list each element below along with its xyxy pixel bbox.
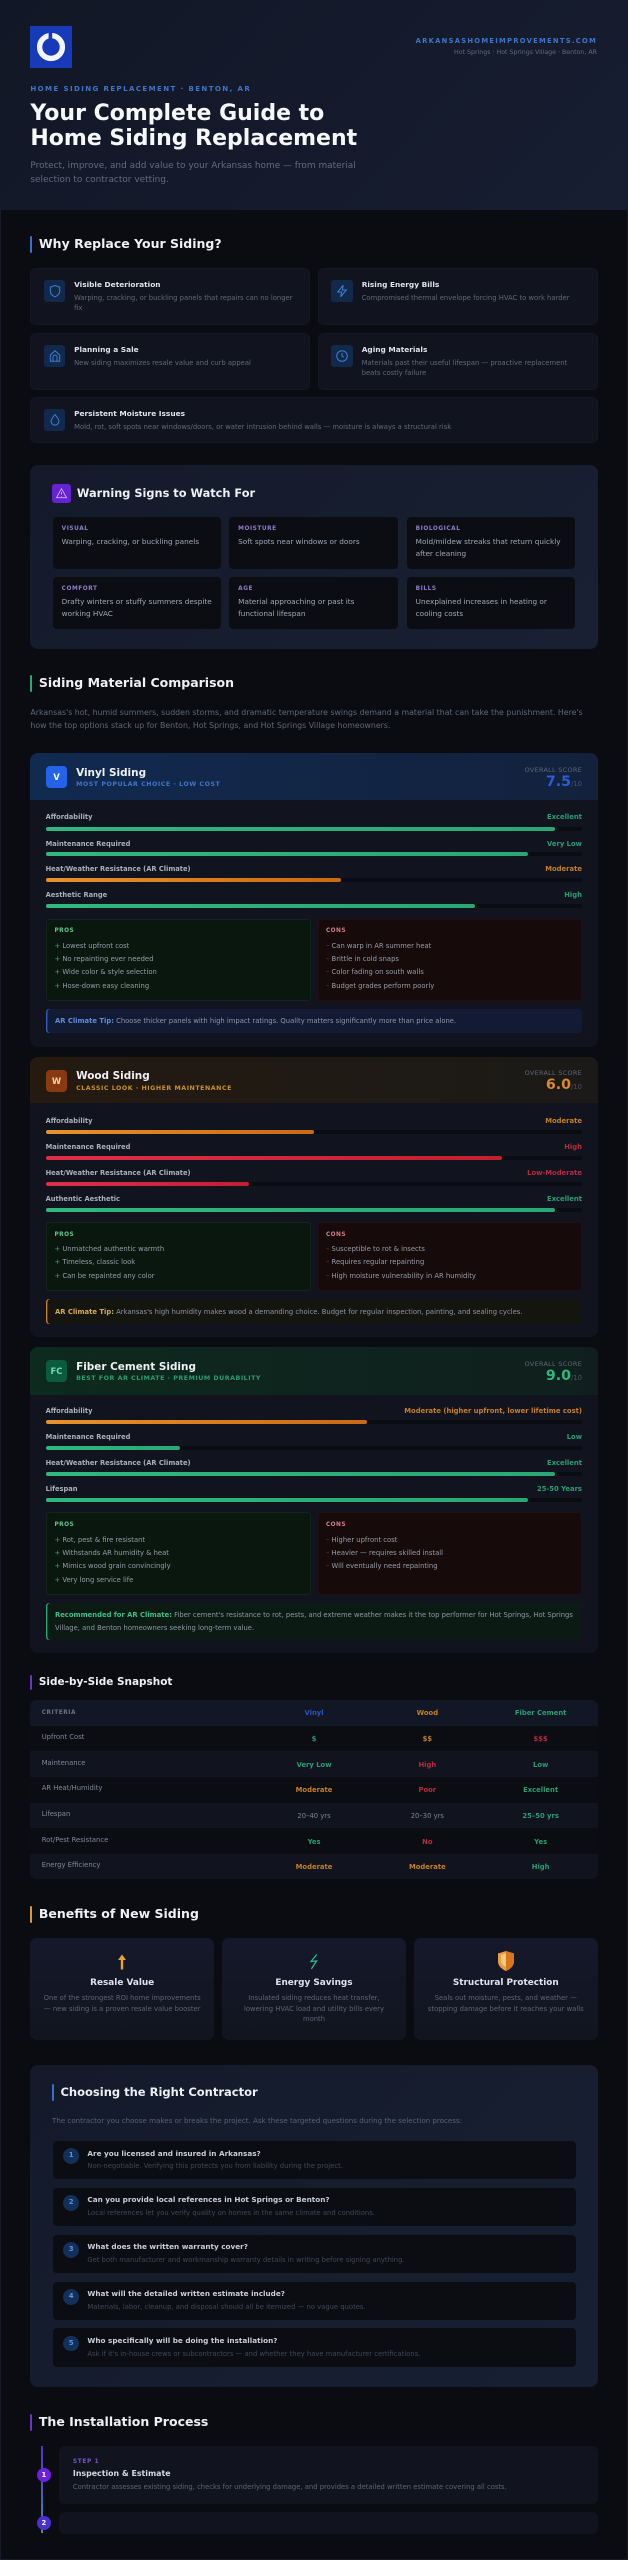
cons list bbox=[326, 1536, 443, 1570]
rating: affordability: Affordability bbox=[46, 1407, 92, 1415]
rating: affordability bbox=[46, 1407, 582, 1424]
description: fix bbox=[74, 304, 82, 312]
pros list: + Withstands AR humidity & heat bbox=[54, 1549, 169, 1557]
site domain: ARKANSASHOMEIMPROVEMENTS.COM bbox=[416, 36, 597, 44]
rating: maintenance bbox=[46, 1143, 582, 1160]
rating: heat resistance: Moderate bbox=[545, 865, 582, 873]
cell: bills: BILLS bbox=[416, 586, 437, 592]
row: energy efficiency: Moderate bbox=[296, 1863, 332, 1871]
panel: warning signs bbox=[30, 465, 598, 649]
description: Mold, rot, soft spots near windows/doors, or water intrusion behind walls — moisture is always a structural risk bbox=[74, 423, 451, 431]
benefit title: Structural Protection bbox=[453, 1978, 559, 1988]
cell text: Mold/mildew streaks that return quickly bbox=[416, 537, 561, 546]
benefit text bbox=[244, 1994, 384, 2023]
row: maintenance: Low bbox=[533, 1761, 548, 1769]
cons list: – Requires regular repainting bbox=[326, 1258, 424, 1266]
overall label: OVERALL SCORE bbox=[525, 1360, 582, 1368]
benefit text: stopping damage before it reaches your walls bbox=[428, 2005, 584, 2013]
fiber recommendation bbox=[46, 1603, 582, 1640]
card: structural protection bbox=[414, 1938, 598, 2040]
rating: maintenance: Very Low bbox=[547, 840, 582, 848]
row: lifespan: 20–40 yrs bbox=[297, 1812, 331, 1820]
heading: material comparison: Siding Material Comparison bbox=[39, 675, 234, 690]
cell: comfort bbox=[53, 577, 221, 629]
pros list: + Timeless, classic look bbox=[54, 1258, 135, 1266]
cell text: Warping, cracking, or buckling panels bbox=[62, 537, 199, 546]
timeline bbox=[36, 2446, 52, 2534]
row: energy efficiency: High bbox=[532, 1863, 550, 1871]
fiber recommendation: Recommended for AR Climate: Fiber cement's resistance to rot, pests, and extreme weather makes it the top performer for Hot Springs, Hot Springs bbox=[55, 1611, 573, 1619]
wood tip bbox=[46, 1299, 582, 1324]
vinyl tagline: MOST POPULAR CHOICE · LOW COST bbox=[76, 781, 220, 788]
fiber pros: PROS bbox=[54, 1522, 74, 1528]
cons list bbox=[326, 942, 434, 990]
subtitle: selection to contractor vetting. bbox=[30, 175, 169, 185]
table header row: Vinyl bbox=[304, 1709, 324, 1717]
pros list bbox=[54, 1536, 171, 1584]
rating: aesthetic bbox=[46, 891, 582, 908]
rating: heat resistance bbox=[46, 865, 582, 882]
rating: affordability bbox=[46, 813, 582, 831]
rating: maintenance: Maintenance Required bbox=[46, 1433, 130, 1441]
answer: Materials, labor, cleanup, and disposal should all be itemized — no vague quotes. bbox=[87, 2303, 366, 2311]
wood badge: W bbox=[52, 1076, 61, 1086]
rating: maintenance bbox=[46, 1433, 582, 1450]
vinyl pros: PROS bbox=[54, 928, 74, 934]
cell: age: AGE bbox=[238, 586, 253, 592]
rating: lifespan: 25-50 Years bbox=[537, 1485, 582, 1493]
title: Planning a Sale bbox=[74, 345, 139, 354]
cell text: cooling costs bbox=[416, 609, 463, 618]
row: maintenance: Very Low bbox=[297, 1761, 332, 1769]
question 5: 5 bbox=[69, 2339, 74, 2347]
description bbox=[74, 294, 292, 312]
panel: fiber cement bbox=[30, 1347, 598, 1653]
overall label: OVERALL SCORE bbox=[525, 766, 582, 774]
rating: affordability: Affordability bbox=[46, 813, 92, 821]
rating: lifespan bbox=[46, 1485, 582, 1502]
benefit text: Seals out moisture, pests, and weather — bbox=[435, 1994, 577, 2002]
title bbox=[30, 101, 357, 151]
intro paragraph: how the top options stack up for Benton, Hot Springs, and Hot Springs Village homeowners. bbox=[30, 721, 390, 730]
pros list: + Lowest upfront cost bbox=[54, 942, 129, 950]
benefit text: Insulated siding reduces heat transfer, bbox=[248, 1994, 380, 2002]
question 1: 1 bbox=[69, 2151, 74, 2159]
row: energy efficiency: Energy Efficiency bbox=[42, 1861, 100, 1869]
row: lifespan bbox=[30, 1803, 598, 1828]
cell text: functional lifespan bbox=[238, 609, 305, 618]
pros list: + Hose-down easy cleaning bbox=[54, 982, 149, 990]
icon: lightning bbox=[310, 1954, 318, 1970]
card: rising energy bills bbox=[318, 268, 598, 325]
row: heat humidity: AR Heat/Humidity bbox=[42, 1784, 102, 1792]
cell text bbox=[62, 597, 212, 618]
pros list: + Can be repainted any color bbox=[54, 1272, 155, 1280]
step marker 1 bbox=[37, 2468, 51, 2482]
icon: bolt bbox=[331, 280, 353, 302]
panel: wood siding bbox=[30, 1057, 598, 1337]
cons list: – Will eventually need repainting bbox=[326, 1562, 438, 1570]
overall label: OVERALL SCORE bbox=[525, 1069, 582, 1077]
description: New siding maximizes resale value and curb appeal bbox=[74, 359, 251, 367]
benefit text: — new siding is a proven resale value booster bbox=[44, 2005, 200, 2013]
title: Visible Deterioration bbox=[74, 280, 161, 289]
logo bbox=[30, 26, 72, 68]
cons list: – Heavier — requires skilled install bbox=[326, 1549, 443, 1557]
row: heat humidity bbox=[30, 1777, 598, 1803]
step marker 2 bbox=[37, 2516, 51, 2530]
card: resale value bbox=[30, 1938, 214, 2040]
cell text: Material approaching or past its bbox=[238, 597, 354, 606]
row: heat humidity: Moderate bbox=[296, 1786, 332, 1794]
fiber score: 9.0/10 bbox=[546, 1368, 582, 1384]
rating: heat resistance: Heat/Weather Resistance (AR Climate) bbox=[46, 1459, 191, 1467]
cons list: – Color fading on south walls bbox=[326, 968, 424, 976]
rating: affordability: Moderate bbox=[545, 1117, 582, 1125]
benefit text: lowering HVAC load and utility bills every bbox=[244, 2005, 384, 2013]
title: Home Siding Replacement bbox=[30, 126, 357, 151]
cell text: after cleaning bbox=[416, 549, 466, 558]
rating: aesthetic: Excellent bbox=[547, 1195, 582, 1203]
row: maintenance: High bbox=[418, 1761, 436, 1769]
title: Aging Materials bbox=[362, 345, 427, 354]
answer: Ask if it's in-house crews or subcontractors — and whether they have manufacturer certifications. bbox=[87, 2350, 420, 2358]
vinyl badge: V bbox=[53, 772, 60, 782]
title: Persistent Moisture Issues bbox=[74, 409, 185, 418]
table header row: CRITERIA bbox=[42, 1710, 76, 1716]
title: Rising Energy Bills bbox=[362, 280, 439, 289]
row: upfront cost: $$$ bbox=[534, 1735, 548, 1743]
pros list: + Mimics wood grain convincingly bbox=[54, 1562, 171, 1570]
wood pros: PROS bbox=[54, 1232, 74, 1238]
panel: choosing contractor bbox=[30, 2065, 598, 2387]
rating: maintenance bbox=[46, 840, 582, 856]
question 2: Can you provide local references in Hot Springs or Benton? bbox=[87, 2195, 330, 2204]
vinyl cons: CONS bbox=[326, 928, 346, 934]
cell: visual bbox=[53, 517, 221, 569]
vinyl score: 7.5/10 bbox=[546, 774, 582, 790]
row: lifespan: 20–30 yrs bbox=[411, 1812, 444, 1820]
wood header bbox=[30, 1057, 598, 1103]
step 1 card bbox=[59, 2446, 598, 2504]
cell text bbox=[238, 597, 354, 618]
pros list: + No repainting ever needed bbox=[54, 955, 153, 963]
icon: warning triangle bbox=[52, 484, 71, 503]
cons list: – Can warp in AR summer heat bbox=[326, 942, 431, 950]
row: lifespan: Lifespan bbox=[42, 1810, 70, 1818]
vinyl tip: AR Climate Tip: Choose thicker panels with high impact ratings. Quality matters significantly more than price alone. bbox=[55, 1017, 456, 1025]
step marker 2: 2 bbox=[42, 2519, 46, 2527]
question 3: What does the written warranty cover? bbox=[87, 2242, 248, 2251]
icon: water drop bbox=[44, 409, 65, 431]
wood tip: AR Climate Tip: Arkansas's high humidity makes wood a demanding choice. Budget for regular inspection, painting, and sealing cycles. bbox=[55, 1308, 522, 1316]
question 4: 4 bbox=[69, 2292, 74, 2300]
icon: shield bbox=[44, 280, 65, 302]
cell text: Soft spots near windows or doors bbox=[238, 537, 360, 546]
service areas: Hot Springs · Hot Springs Village · Benton, AR bbox=[454, 49, 597, 56]
row: rot pest: Yes bbox=[308, 1838, 321, 1846]
benefit text bbox=[44, 1994, 201, 2013]
row: upfront cost bbox=[30, 1726, 598, 1751]
cell: bills bbox=[407, 577, 575, 629]
cell text: Unexplained increases in heating or bbox=[416, 597, 547, 606]
row: rot pest: Rot/Pest Resistance bbox=[42, 1836, 108, 1844]
cell: biological bbox=[407, 517, 575, 569]
vinyl header bbox=[30, 753, 598, 800]
benefit title: Energy Savings bbox=[275, 1978, 353, 1988]
rating: affordability bbox=[46, 1117, 582, 1134]
intro text: The contractor you choose makes or breaks the project. Ask these targeted questions during the selection process: bbox=[52, 2116, 462, 2125]
benefit text: One of the strongest ROI home improvements bbox=[44, 1994, 201, 2002]
rating: aesthetic: Aesthetic Range bbox=[46, 891, 107, 899]
rating: affordability: Moderate (higher upfront, lower lifetime cost) bbox=[404, 1407, 582, 1415]
fiber badge bbox=[46, 1360, 67, 1382]
step label: STEP 1 bbox=[73, 2459, 99, 2465]
fiber name: Fiber Cement Siding bbox=[76, 1361, 196, 1373]
cell text bbox=[416, 597, 547, 618]
heading: benefits: Benefits of New Siding bbox=[39, 1906, 199, 1921]
cell text: Drafty winters or stuffy summers despite bbox=[62, 597, 212, 606]
fiber tagline: BEST FOR AR CLIMATE · PREMIUM DURABILITY bbox=[76, 1375, 261, 1382]
row: energy efficiency bbox=[30, 1854, 598, 1879]
table header row bbox=[30, 1700, 598, 1726]
cell: age bbox=[229, 577, 398, 629]
benefit text bbox=[414, 1993, 598, 2014]
question 2: 2 bbox=[69, 2198, 74, 2206]
step text: Contractor assesses existing siding, checks for underlying damage, and provides a detailed written estimate covering all costs. bbox=[73, 2483, 507, 2491]
description: Compromised thermal envelope forcing HVAC to work harder bbox=[362, 294, 570, 302]
cell text bbox=[416, 537, 561, 558]
vinyl name: Vinyl Siding bbox=[76, 767, 146, 779]
pros list: + Rot, pest & fire resistant bbox=[54, 1536, 145, 1544]
pros list: + Very long service life bbox=[54, 1576, 133, 1584]
question 5 bbox=[53, 2328, 576, 2367]
row: rot pest: No bbox=[422, 1838, 433, 1846]
header bbox=[0, 0, 628, 210]
description: beats costly failure bbox=[362, 369, 426, 377]
icon: clock bbox=[331, 344, 353, 367]
cell: moisture bbox=[229, 517, 398, 569]
intro paragraph bbox=[30, 708, 583, 730]
answer: Local references let you verify quality on homes in the same climate and conditions. bbox=[87, 2209, 375, 2217]
wood cons: CONS bbox=[326, 1232, 346, 1238]
step marker 1: 1 bbox=[42, 2471, 46, 2479]
rating: maintenance: Low bbox=[567, 1433, 582, 1441]
subtitle bbox=[30, 161, 356, 185]
question 3: 3 bbox=[69, 2245, 74, 2253]
rating: aesthetic bbox=[46, 1195, 582, 1212]
row: energy efficiency: Moderate bbox=[409, 1863, 446, 1871]
question 1 bbox=[53, 2141, 576, 2179]
heading: installation process: The Installation Process bbox=[39, 2414, 208, 2429]
card: persistent moisture bbox=[30, 397, 598, 443]
row: lifespan: 25–50 yrs bbox=[522, 1812, 559, 1820]
wood name: Wood Siding bbox=[76, 1070, 150, 1082]
row: upfront cost: $ bbox=[312, 1735, 316, 1743]
pros list: + Wide color & style selection bbox=[54, 968, 157, 976]
card: planning a sale bbox=[30, 333, 310, 390]
rating: heat resistance bbox=[46, 1459, 582, 1476]
icon: power ring bbox=[36, 33, 66, 62]
subtitle: Protect, improve, and add value to your Arkansas home — from material bbox=[30, 161, 356, 171]
description: Materials past their useful lifespan — proactive replacement bbox=[362, 359, 567, 367]
cell: visual: VISUAL bbox=[62, 526, 88, 532]
cons list: – Budget grades perform poorly bbox=[326, 982, 434, 990]
benefit text: month bbox=[303, 2015, 325, 2023]
cell: biological: BIOLOGICAL bbox=[416, 526, 460, 532]
rating: lifespan: Lifespan bbox=[46, 1485, 78, 1493]
question 4 bbox=[53, 2282, 576, 2320]
table header row: Fiber Cement bbox=[515, 1709, 566, 1717]
pros list: + Unmatched authentic warmth bbox=[54, 1245, 164, 1253]
question 2 bbox=[53, 2188, 576, 2226]
rating: aesthetic: Authentic Aesthetic bbox=[46, 1195, 120, 1203]
cons list: – Brittle in cold snaps bbox=[326, 955, 399, 963]
comparison table bbox=[30, 1700, 598, 1879]
rating: maintenance: Maintenance Required bbox=[46, 1143, 130, 1151]
rating: heat resistance: Heat/Weather Resistance (AR Climate) bbox=[46, 865, 191, 873]
answer: Get both manufacturer and workmanship warranty details in writing before signing anything. bbox=[87, 2256, 405, 2264]
rating: heat resistance: Excellent bbox=[547, 1459, 582, 1467]
cons list: – Susceptible to rot & insects bbox=[326, 1245, 425, 1253]
cell text: working HVAC bbox=[62, 609, 113, 618]
card: visible deterioration bbox=[30, 268, 310, 325]
intro paragraph: Arkansas's hot, humid summers, sudden storms, and dramatic temperature swings demand a material that can take the punishment. Here's bbox=[30, 708, 583, 717]
rating: maintenance: Maintenance Required bbox=[46, 840, 130, 848]
wood cons bbox=[318, 1222, 582, 1291]
cons list: – Higher upfront cost bbox=[326, 1536, 397, 1544]
fiber cons bbox=[318, 1512, 582, 1595]
vinyl pros bbox=[46, 919, 311, 1001]
description: Warping, cracking, or buckling panels that repairs can no longer bbox=[74, 294, 292, 302]
heading: snapshot: Side-by-Side Snapshot bbox=[39, 1676, 172, 1688]
question 3 bbox=[53, 2235, 576, 2273]
icon: house bbox=[44, 344, 65, 367]
pros list bbox=[54, 1245, 164, 1280]
row: heat humidity: Excellent bbox=[523, 1786, 558, 1794]
fiber cons: CONS bbox=[326, 1522, 346, 1528]
icon: shield bbox=[498, 1951, 514, 1971]
row: upfront cost: $$ bbox=[423, 1735, 432, 1743]
cell: moisture: MOISTURE bbox=[238, 526, 277, 532]
rating: heat resistance: Low-Moderate bbox=[527, 1169, 582, 1177]
vinyl tip bbox=[46, 1009, 582, 1033]
panel: vinyl siding bbox=[30, 753, 598, 1047]
timeline line bbox=[41, 2446, 43, 2533]
row: maintenance: Maintenance bbox=[42, 1759, 85, 1767]
wood tagline: CLASSIC LOOK · HIGHER MAINTENANCE bbox=[76, 1085, 232, 1092]
cons list: – High moisture vulnerability in AR humidity bbox=[326, 1272, 476, 1280]
eyebrow: HOME SIDING REPLACEMENT · BENTON, AR bbox=[30, 84, 251, 93]
fiber header bbox=[30, 1347, 598, 1395]
heading: Choosing the Right Contractor bbox=[60, 2085, 258, 2099]
answer: Non-negotiable. Verifying this protects you from liability during the project. bbox=[87, 2162, 343, 2170]
title: Your Complete Guide to bbox=[30, 101, 324, 126]
rating: maintenance: High bbox=[564, 1143, 582, 1151]
question 4: What will the detailed written estimate include? bbox=[87, 2289, 285, 2298]
card: aging materials bbox=[318, 333, 598, 390]
fiber pros bbox=[46, 1512, 311, 1595]
fiber badge: FC bbox=[51, 1366, 62, 1376]
wood badge bbox=[46, 1070, 67, 1092]
row: maintenance bbox=[30, 1751, 598, 1777]
rating: aesthetic: High bbox=[564, 891, 582, 899]
heading: why replace: Why Replace Your Siding? bbox=[39, 236, 222, 251]
rating: affordability: Affordability bbox=[46, 1117, 92, 1125]
row: upfront cost: Upfront Cost bbox=[42, 1733, 84, 1741]
row: heat humidity: Poor bbox=[418, 1786, 436, 1794]
rating: heat resistance bbox=[46, 1169, 582, 1186]
row: rot pest bbox=[30, 1828, 598, 1854]
benefit title: Resale Value bbox=[90, 1978, 154, 1988]
card: energy savings bbox=[222, 1938, 406, 2040]
rating: heat resistance: Heat/Weather Resistance (AR Climate) bbox=[46, 1169, 191, 1177]
cell: comfort: COMFORT bbox=[62, 586, 98, 592]
icon: up arrow bbox=[118, 1954, 126, 1970]
vinyl cons bbox=[318, 919, 582, 1001]
question 5: Who specifically will be doing the installation? bbox=[87, 2336, 277, 2345]
step title: Inspection & Estimate bbox=[73, 2469, 171, 2478]
vinyl badge bbox=[46, 766, 67, 788]
pros list bbox=[54, 942, 157, 990]
wood pros bbox=[46, 1222, 311, 1291]
cons list bbox=[326, 1245, 476, 1280]
question 1: Are you licensed and insured in Arkansas? bbox=[87, 2149, 261, 2158]
step 2 card bbox=[59, 2512, 598, 2534]
wood score: 6.0/10 bbox=[546, 1077, 582, 1093]
description bbox=[362, 359, 568, 377]
table header row: Wood bbox=[417, 1709, 438, 1717]
heading: Warning Signs to Watch For bbox=[77, 486, 255, 500]
row: rot pest: Yes bbox=[534, 1838, 547, 1846]
fiber recommendation: Village, and Benton homeowners seeking long-term value. bbox=[55, 1624, 254, 1632]
rating: affordability: Excellent bbox=[547, 813, 582, 821]
